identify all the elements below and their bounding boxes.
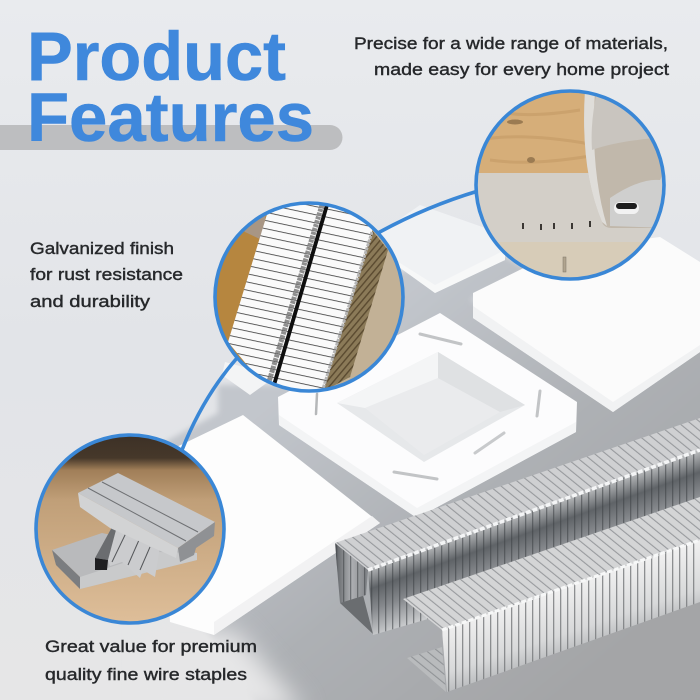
text: galvanized finish: [30, 239, 183, 311]
text: precise for materials: Precise for a wide range of materials,: [354, 34, 668, 53]
text: great value: Great value for premium: [45, 637, 257, 656]
white canvas: top small: [380, 205, 505, 293]
text: galvanized finish: for rust resistance: [30, 265, 183, 284]
title: [27, 18, 314, 156]
grey title bar: [0, 125, 342, 150]
floor: [165, 256, 700, 700]
staples on canvas frame: [316, 334, 540, 479]
text: precise for materials: made easy for every home project: [374, 60, 669, 79]
white canvas: centre frame: [278, 313, 577, 518]
white canvas: right: [473, 237, 700, 412]
connector lines: [182, 191, 478, 450]
white canvas: bottom left: [160, 415, 380, 635]
title: Product: [27, 18, 286, 95]
text: galvanized finish: Galvanized finish: [30, 239, 174, 258]
circle: stack of staples: [30, 430, 230, 630]
title: Features: [27, 79, 314, 156]
circle: galvanized staple close-up: [213, 201, 405, 393]
staple strip: front: [403, 497, 700, 692]
floor fade at bottom: [150, 630, 305, 700]
text: galvanized finish: and durability: [30, 292, 151, 311]
text: great value: [45, 637, 257, 684]
text: precise for materials: [354, 34, 669, 79]
circle: stapler on fabric: [470, 85, 670, 287]
white canvas: small behind middle circle: [222, 362, 268, 395]
staple strip: rear: [335, 418, 700, 635]
text: great value: quality fine wire staples: [45, 665, 247, 684]
